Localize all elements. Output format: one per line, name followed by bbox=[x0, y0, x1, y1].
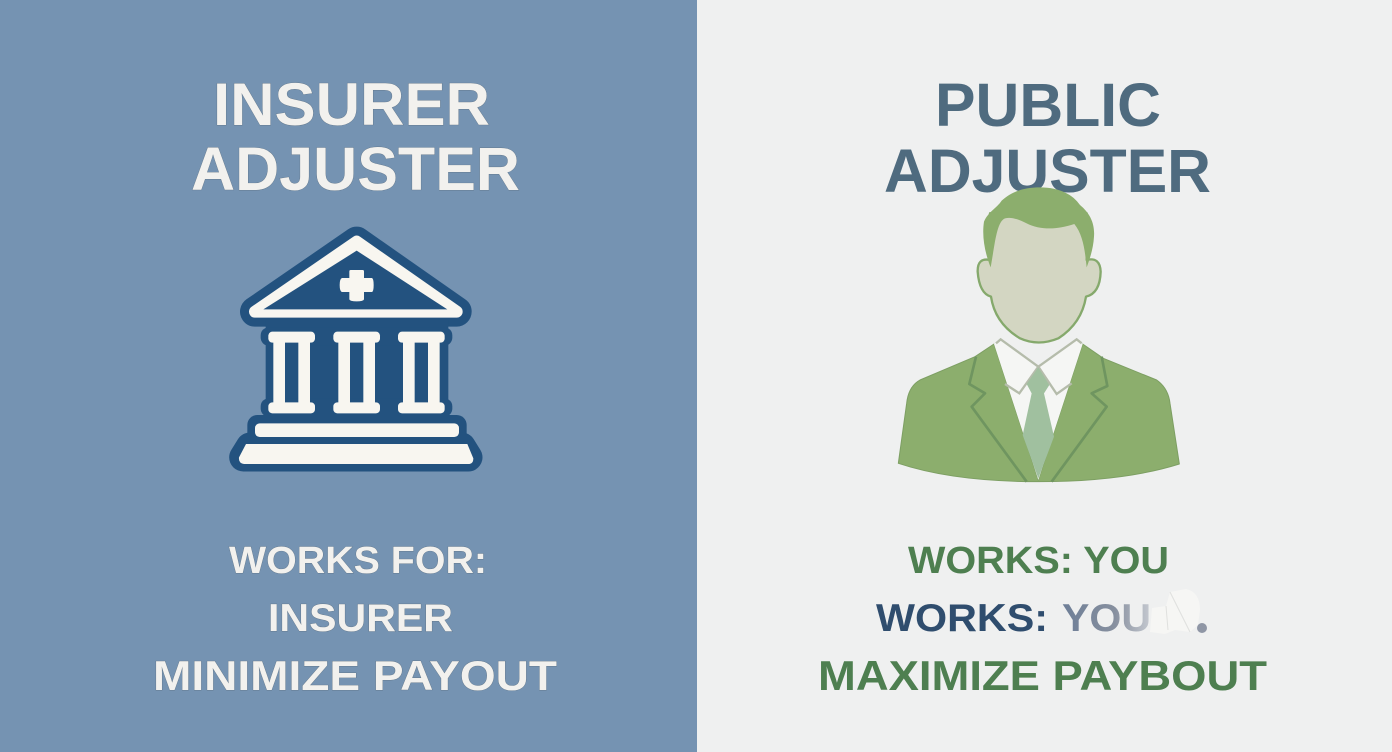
heading: public adjuster bbox=[884, 71, 1211, 205]
hair bbox=[983, 187, 1094, 267]
building dark outline bbox=[243, 242, 468, 457]
shirt bbox=[994, 339, 1083, 480]
text: works for insurer, minimize payout: WORKS FOR: bbox=[229, 540, 487, 582]
panel: insurer adjuster bbox=[0, 0, 697, 752]
text: works you, maximize payout bbox=[818, 540, 1267, 699]
smudge artifact after you bbox=[1150, 589, 1207, 634]
tie bbox=[1023, 367, 1054, 478]
text: works you, maximize payout: WORKS: bbox=[876, 597, 1048, 640]
roof pediment bbox=[255, 242, 457, 312]
heading: insurer adjuster: ADJUSTER bbox=[191, 135, 520, 203]
text: works for insurer, minimize payout bbox=[153, 540, 557, 699]
head with ears bbox=[978, 213, 1101, 342]
text: works for insurer, minimize payout: MINIMIZE PAYOUT bbox=[153, 652, 557, 699]
collar bbox=[996, 339, 1082, 394]
heading: public adjuster: PUBLIC bbox=[935, 71, 1161, 139]
heading: insurer adjuster bbox=[191, 71, 520, 203]
text: works you, maximize payout: MAXIMIZE PAYBOUT bbox=[818, 652, 1267, 699]
heading: public adjuster: ADJUSTER bbox=[884, 137, 1211, 205]
icon: insurance building with cross bbox=[239, 242, 473, 464]
lapels bbox=[969, 357, 1107, 482]
suit jacket bbox=[898, 344, 1179, 482]
icon: person in suit bbox=[898, 187, 1179, 482]
columns bbox=[268, 332, 445, 413]
text: works you, maximize payout: YOU bbox=[1062, 597, 1151, 640]
text: works you, maximize payout: WORKS: YOU bbox=[908, 540, 1169, 582]
steps bbox=[239, 423, 473, 464]
cross bbox=[340, 270, 374, 301]
text: works for insurer, minimize payout: INSURER bbox=[268, 597, 453, 640]
panel: public adjuster bbox=[697, 0, 1392, 752]
heading: insurer adjuster: INSURER bbox=[213, 71, 490, 138]
